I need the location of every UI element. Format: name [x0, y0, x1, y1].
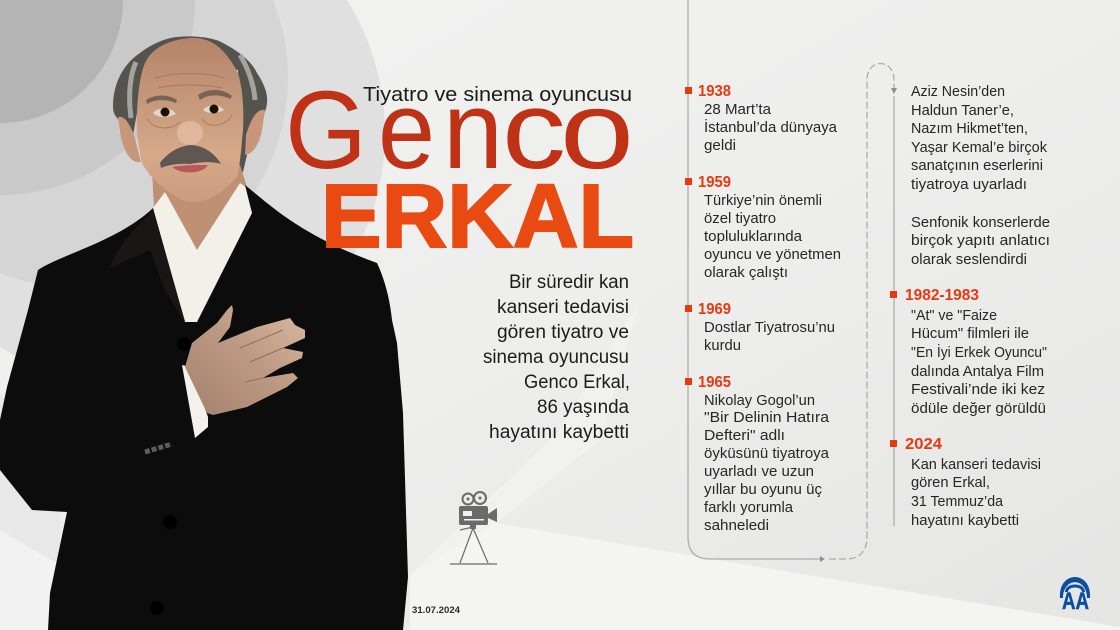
entry 1959: 1959: [698, 174, 731, 191]
entry 1965: farklı yorumla: [704, 499, 794, 516]
entry 1959: Türkiye’nin önemli: [704, 192, 822, 209]
entry 1969: kurdu: [704, 337, 741, 354]
shirt cuff: [182, 365, 208, 438]
entry 1982-1983: "En İyi Erkek Oyuncu": [911, 343, 1047, 361]
finger creases: [240, 330, 283, 382]
summary text: gören tiyatro ve: [497, 322, 629, 343]
entry 1965: [685, 374, 830, 534]
hair highlights: [130, 55, 255, 118]
timeline column 1: [685, 83, 841, 534]
entry 1965: yıllar bu oyunu üç: [704, 481, 822, 498]
forehead lines: [155, 74, 225, 88]
entry 1982-1983: "At" ve "Faize: [911, 307, 997, 324]
moustache: [160, 145, 221, 168]
lips: [172, 165, 208, 172]
entry 2024: gören Erkal,: [911, 474, 990, 491]
entry 1959: özel tiyatro: [704, 210, 776, 227]
jacket: [0, 185, 408, 630]
entry 1969: 1969: [698, 301, 731, 318]
summary text: [483, 272, 630, 443]
jacket buttons: [150, 337, 191, 615]
entry 1965: "Bir Delinin Hatıra: [704, 409, 830, 426]
name: ERKAL: ERKAL: [321, 167, 634, 267]
concerts text: olarak seslendirdi: [911, 251, 1027, 268]
adaptations text: sanatçının eserlerini: [911, 157, 1043, 174]
icon: film camera on tripod: [450, 492, 497, 564]
entry 1938: geldi: [704, 137, 736, 154]
adaptations text: Nazım Hikmet’ten,: [911, 120, 1028, 137]
under-eye folds: [147, 115, 232, 128]
entry 1982-1983: Festivali’nde iki kez: [911, 381, 1045, 398]
entry 1959: [685, 174, 841, 281]
date: 31.07.2024: [412, 605, 461, 616]
concerts text: birçok yapıtı anlatıcı: [911, 232, 1050, 249]
timeline connector line: [688, 0, 897, 562]
sleeve buttons: [145, 444, 172, 452]
name: Genco: o: [560, 69, 634, 192]
adaptations text: tiyatroya uyarladı: [911, 176, 1027, 193]
entry 1965: Nikolay Gogol’un: [704, 392, 815, 409]
logo: AA: [1060, 577, 1090, 615]
entry 1959: oyuncu ve yönetmen: [704, 246, 841, 263]
summary text: kanseri tedavisi: [497, 297, 629, 318]
summary text: Genco Erkal,: [524, 372, 630, 393]
entry 2024: Kan kanseri tedavisi: [911, 456, 1041, 473]
entry 1982-1983: [890, 287, 1047, 417]
name: Genco: e: [378, 69, 435, 192]
entry 2024: 2024: [905, 436, 942, 453]
entry 1965: öyküsünü tiyatroya: [704, 445, 830, 462]
summary text: sinema oyuncusu: [483, 347, 629, 368]
entry 2024: [890, 436, 1041, 529]
brows: [146, 90, 232, 104]
adaptations text: Aziz Nesin’den: [911, 83, 1005, 100]
entry 1938: [685, 83, 838, 154]
portrait photo: Genco Erkal: [0, 36, 408, 630]
adaptations text: Haldun Taner’e,: [911, 102, 1014, 119]
entry 1965: 1965: [698, 374, 731, 391]
entry 1982-1983: ödüle değer görüldü: [911, 400, 1046, 417]
timeline column 2: [890, 83, 1050, 529]
entry 1959: topluluklarında: [704, 228, 803, 245]
nose: [177, 121, 203, 145]
summary text: hayatını kaybetti: [489, 422, 629, 443]
adaptations text: [911, 83, 1047, 193]
lapel: [110, 210, 186, 325]
neck: [152, 165, 248, 250]
entry 1959: olarak çalıştı: [704, 264, 788, 281]
entry 1938: İstanbul’da dünyaya: [704, 118, 838, 136]
entry 1965: sahneledi: [704, 517, 769, 534]
entry 1965: Defteri" adlı: [704, 427, 785, 444]
entry 1982-1983: Hücum" filmleri ile: [911, 325, 1029, 342]
name: Genco: n: [443, 69, 503, 192]
summary text: Bir süredir kan: [509, 272, 629, 293]
logo: AA: AA: [1062, 588, 1089, 615]
entry 2024: 31 Temmuz’da: [911, 493, 1004, 510]
name: Genco: G: [285, 69, 367, 192]
eyes: [153, 105, 224, 117]
summary text: 86 yaşında: [537, 397, 629, 418]
concerts text: Senfonik konserlerde: [911, 214, 1050, 231]
adaptations text: Yaşar Kemal’e birçok: [911, 139, 1047, 156]
entry 1982-1983: 1982-1983: [905, 287, 979, 304]
entry 1969: [685, 301, 835, 354]
entry 2024: hayatını kaybetti: [911, 512, 1019, 529]
entry 1938: 28 Mart’ta: [704, 101, 772, 118]
concerts text: [911, 214, 1050, 268]
subtitle: Tiyatro ve sinema oyuncusu: [363, 84, 632, 106]
name: Genco: [285, 69, 634, 192]
entry 1982-1983: dalında Antalya Film: [911, 363, 1044, 380]
ears: [118, 110, 265, 162]
hand: [185, 305, 305, 415]
hair: [113, 36, 267, 172]
white shirt: [153, 183, 256, 335]
entry 1969: Dostlar Tiyatrosu’nu: [704, 319, 835, 336]
entry 1965: uyarladı ve uzun: [704, 463, 814, 480]
name: Genco: c: [502, 69, 566, 192]
face: [137, 38, 243, 202]
entry 1938: 1938: [698, 83, 731, 100]
